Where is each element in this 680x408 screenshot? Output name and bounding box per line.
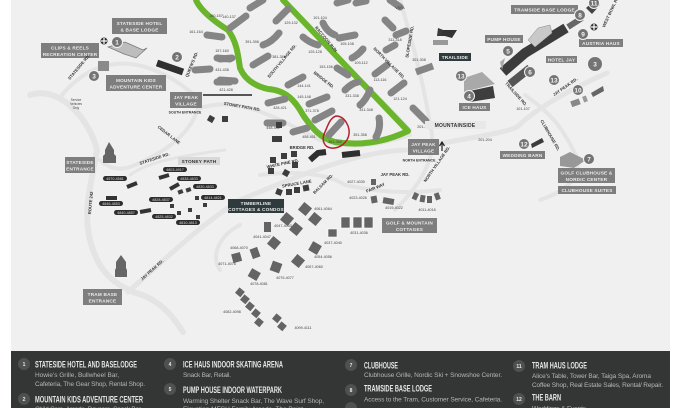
numbered map markers: 9 xyxy=(581,32,585,38)
building unit labels: 4054-4056 xyxy=(314,255,332,259)
building unit labels: 4023-4026 xyxy=(349,196,367,200)
numbered map markers: 13 xyxy=(457,74,465,80)
stateside cottage pills: 4840-4857 xyxy=(117,211,135,215)
building unit labels: 351-358 xyxy=(353,133,367,137)
location label: wedding barn: WEDDING BARN xyxy=(503,153,543,158)
location label: mountain kids: MOUNTAIN KIDS xyxy=(116,78,156,83)
road names: STATESIDE RD. xyxy=(139,151,170,166)
location label: timberline: COTTAGES & CONDOS xyxy=(228,207,284,212)
location label: golf clubhouse: GOLF CLUBHOUSE & xyxy=(561,170,613,176)
location label: jay peak village south: JAY PEAK xyxy=(174,95,199,100)
location label: ice haus: ICE HAUS xyxy=(462,105,486,110)
road names: RACCOON RUN xyxy=(314,25,338,53)
location label: mountainside xyxy=(425,121,486,129)
road names: NORTH VILLAGE RD. xyxy=(372,46,406,80)
legend item 2: mountain kids: MOUNTAIN KIDS ADVENTURE CENTER xyxy=(35,394,143,404)
building unit labels: VSFA xyxy=(395,6,405,10)
building unit labels: 4027-4030 xyxy=(347,180,365,184)
legend item 5: pump house: 5 xyxy=(169,387,172,393)
stateside cottage pills xyxy=(99,167,225,225)
location label: jay peak village south: SOUTH ENTRANCE xyxy=(169,110,202,114)
stateside cottage pills: 4838-4833 xyxy=(180,177,198,181)
location label: stateside entrance: STATESIDE xyxy=(66,160,94,165)
legend item 2: mountain kids xyxy=(18,393,143,408)
location label: stateside entrance xyxy=(65,157,95,173)
red circled unit xyxy=(323,116,349,148)
location label: stoney path xyxy=(178,157,220,165)
location label: mountainside: MOUNTAINSIDE xyxy=(435,123,476,129)
legend panel xyxy=(11,351,670,408)
building unit labels: 4061-4064 xyxy=(314,207,332,211)
location label: hotel jay: HOTEL JAY xyxy=(548,58,576,62)
building unit labels: 160-157 xyxy=(209,14,223,18)
building unit labels: 4011-4018 xyxy=(418,208,436,212)
road names: JAY PEAK RD. xyxy=(381,172,409,177)
legend item 5: pump house: PUMP HOUSE INDOOR WATERPARK xyxy=(183,385,282,395)
legend item 4: ice haus: ICE HAUS INDOOR SKATING ARENA xyxy=(183,360,283,370)
legend item 12: the barn: 12 xyxy=(516,397,522,403)
location label: stateside hotel: & BASE LODGE xyxy=(120,28,159,32)
building unit labels: 371-378 xyxy=(305,109,319,113)
location label: golf clubhouse: NORDIC CENTER xyxy=(566,177,608,182)
legend item 1: stateside hotel: 1 xyxy=(23,362,26,368)
building unit labels: 4031-4036 xyxy=(350,231,368,235)
building unit labels: 4057-4060 xyxy=(305,265,323,269)
road names: SLOPESIDE RD. xyxy=(404,25,415,58)
legend item 11: tram haus lodge: Alice's Table, Tower Bar, Taiga Spa, Aroma xyxy=(532,373,651,380)
road names: QUEEN'S RD. xyxy=(184,51,199,78)
numbered map markers: 13 xyxy=(550,78,558,84)
road names: WHITE PINE RD. xyxy=(266,158,299,169)
road names: FAIR WAY xyxy=(365,181,386,194)
legend item 2: mountain kids: 2 xyxy=(23,397,26,403)
building unit labels: 4068-4070 xyxy=(230,246,248,250)
numbered map markers: 4 xyxy=(467,94,471,100)
building unit labels: 153-156 xyxy=(319,65,333,69)
numbered map markers: 6 xyxy=(528,70,532,76)
road names: STONEY PATH RD. xyxy=(223,101,261,112)
location label: jay peak village north: NORTH ENTRANCE xyxy=(403,158,436,162)
numbered map markers: 12 xyxy=(520,142,528,148)
pump house and tramside complex xyxy=(500,0,600,84)
residential buildings xyxy=(195,0,433,137)
building unit labels: 121-124 xyxy=(393,97,407,101)
location label: ice haus xyxy=(459,103,490,111)
building unit labels: 301-308 xyxy=(412,58,426,62)
road network xyxy=(30,0,607,332)
location label: jay peak village north: VILLAGE xyxy=(413,148,434,154)
road names: Only xyxy=(73,106,80,110)
building unit labels: 101-104 xyxy=(313,16,327,20)
building unit labels: 381-388 xyxy=(272,55,286,59)
road names: NORTH VILLAGE RD. xyxy=(423,145,451,183)
building unit labels: 201-202 xyxy=(417,125,431,129)
entrance totem icons xyxy=(103,142,127,277)
legend item 7: clubhouse: 7 xyxy=(350,363,353,369)
building unit labels: 101-107 xyxy=(516,107,530,111)
legend item 4: ice haus: 4 xyxy=(169,362,172,368)
legend item 1: stateside hotel: STATESIDE HOTEL AND BASELODGE xyxy=(35,360,137,370)
numbered map markers: 3 xyxy=(92,74,96,80)
location label: clips and reels xyxy=(41,43,99,58)
legend item 1: stateside hotel: Cafeteria, The Gear Shop, Rental Shop. xyxy=(35,381,145,388)
numbered map markers xyxy=(88,0,602,164)
location label: austria haus xyxy=(579,39,623,47)
location label: jay peak village north: JAY PEAK xyxy=(411,142,436,147)
location label: tram base entrance xyxy=(83,289,122,305)
jay peak village cottages, dark xyxy=(207,115,360,177)
numbered map markers: 7 xyxy=(587,156,591,164)
building unit labels: 331-338 xyxy=(345,94,359,98)
building unit labels: 431-438 xyxy=(215,68,229,72)
road names: JAY PEAK RD. xyxy=(552,76,578,97)
stateside cottage pills: 4828-4837 xyxy=(152,198,170,202)
location label: stateside hotel: STATESIDE HOTEL xyxy=(117,21,162,26)
road names: SOUTH VILLAGE RD. xyxy=(266,43,297,79)
building unit labels: 201-204 xyxy=(478,138,492,142)
stateside cottage pills: 4803-4917 xyxy=(166,168,184,172)
legend item 4: ice haus xyxy=(164,358,283,379)
building unit labels: 4075-4077 xyxy=(276,276,294,280)
building unit labels: 4041-4047 xyxy=(253,235,271,239)
location label: clips and reels: RECREATION CENTER xyxy=(43,52,98,57)
legend item 8: tramside base lodge: TRAMSIDE BASE LODGE xyxy=(364,384,432,394)
building unit labels: 161-164 xyxy=(189,30,203,34)
numbered map markers: 3 xyxy=(593,62,597,68)
legend item 11: tram haus lodge: TRAM HAUS LODGE xyxy=(532,360,587,370)
building unit labels: 421-428 xyxy=(219,88,233,92)
building unit labels: 4071-4076 xyxy=(218,262,236,266)
road names xyxy=(67,0,620,281)
location label: tramside base lodge: TRAMSIDE BASE LODGE xyxy=(514,8,575,12)
building unit labels: 458-451 xyxy=(302,135,316,139)
building unit labels: 391-398 xyxy=(245,40,259,44)
location label: jay peak village south: VILLAGE xyxy=(175,102,197,106)
building unit labels: 125-128 xyxy=(308,50,322,54)
building unit labels: 4099-4111 xyxy=(294,326,312,330)
location label: wedding barn xyxy=(500,151,545,159)
numbered map markers: 11 xyxy=(591,0,598,8)
stateside cottage pills: 4825-4832 xyxy=(155,215,173,219)
building unit labels: 145-148 xyxy=(297,95,311,99)
location label: tramside base lodge xyxy=(511,5,578,14)
numbered map markers: 2 xyxy=(175,54,179,62)
building unit labels: 105-108 xyxy=(340,42,354,46)
green route xyxy=(196,0,408,144)
stateside cottage pills: 4810-4813 xyxy=(179,221,197,225)
timberline cottages squares xyxy=(231,179,441,331)
legend item 12: the barn: THE BARN xyxy=(532,392,561,402)
building unit labels: 4047-4053 xyxy=(274,224,292,228)
building unit labels: 129-132 xyxy=(284,21,298,25)
building unit labels: 4078-4081 xyxy=(250,282,268,286)
location label: mountain kids: ADVENTURE CENTER xyxy=(110,84,163,90)
location label: stoney path: STONEY PATH xyxy=(182,159,217,164)
legend item 8: tramside base lodge xyxy=(345,384,502,408)
other resort buildings xyxy=(433,28,604,168)
location label: timberline xyxy=(228,199,284,213)
road names: CLUBHOUSE RD. xyxy=(539,119,561,152)
location label: pump house xyxy=(485,35,523,43)
stateside cottage pills: 4846-4853 xyxy=(102,202,120,206)
stateside hotel building xyxy=(98,42,183,72)
legend item 11: tram haus lodge: Coffee Shop, Real Estate Sales, Rental/ Repair. xyxy=(532,382,663,389)
legend item 8: tramside base lodge: 8 xyxy=(350,388,353,394)
legend item 12: the barn xyxy=(513,392,587,408)
location label: stateside entrance: ENTRANCE xyxy=(66,166,94,172)
legend item 4: ice haus: Snack Bar, Retail. xyxy=(183,372,231,379)
building unit labels: 144-141 xyxy=(297,84,311,88)
building unit labels: 4019-4022 xyxy=(385,206,403,210)
building unit labels xyxy=(189,6,530,330)
building unit labels: 109-112 xyxy=(354,61,368,65)
location label: tram base entrance: TRAM BASE xyxy=(88,292,117,297)
building unit labels: 361-368 xyxy=(328,140,342,144)
legend item 7: clubhouse: CLUBHOUSE xyxy=(364,360,398,370)
location label: mountain kids xyxy=(106,75,166,91)
road names: BRIDGE RD. xyxy=(313,70,335,89)
location label: golf clubhouse xyxy=(558,168,615,183)
building unit labels: 140-137 xyxy=(222,15,236,19)
legend item 8: tramside base lodge: Access to the Tram, Customer Service, Cafeteria. xyxy=(364,396,502,404)
location label: tram base entrance: ENTRANCE xyxy=(89,298,116,304)
legend item 5: pump house: Warming Shelter Snack Bar, The Wave Surf Shop, xyxy=(183,398,324,405)
location label: hotel jay xyxy=(546,56,577,63)
location label: trailside xyxy=(439,53,471,61)
location label: trailside: TRAILSIDE xyxy=(442,55,468,60)
building unit labels: 4082-4098 xyxy=(223,310,241,314)
stateside cottage pills: 4814-4821 xyxy=(204,196,222,200)
location label: stateside hotel xyxy=(112,18,167,34)
road names: Vehicles xyxy=(70,102,82,106)
legend item 1: stateside hotel: Howie's Grille, Bullwheel Bar, xyxy=(35,372,119,379)
location label: clips and reels: CLIPS & REELS xyxy=(51,46,89,50)
arrows and snowflake icons xyxy=(100,24,598,151)
road names: Service xyxy=(71,98,82,102)
stateside cottage pills: 4830-4833 xyxy=(196,185,214,189)
location label: golf and mountain cottages: COTTAGES xyxy=(396,227,423,232)
legend item 5: pump house xyxy=(164,383,324,408)
numbered map markers: 8 xyxy=(578,12,582,20)
legend item 7: clubhouse xyxy=(345,359,502,379)
road names: CEDAR LANE xyxy=(157,124,181,145)
building unit labels: 311-318 xyxy=(388,38,402,42)
building unit labels: 448-441 xyxy=(266,126,280,130)
numbered map markers: 5 xyxy=(506,48,510,56)
road names: ROUTE 242 xyxy=(87,191,94,214)
stateside cottage pills: 4570-4581 xyxy=(106,177,124,181)
road names: BALSAM RD. xyxy=(312,173,334,195)
building unit labels: 113-116 xyxy=(374,78,386,82)
road names: BRIDGE RD. xyxy=(290,145,314,150)
location label: golf and mountain cottages: GOLF & MOUNTAIN xyxy=(386,220,433,226)
road names: SPRUCE LANE xyxy=(282,178,312,189)
location label: clubhouse suites xyxy=(558,186,616,194)
road names: TRAILSIDE RD. xyxy=(504,81,528,107)
location label: golf and mountain cottages xyxy=(382,218,437,233)
ice haus building xyxy=(464,72,495,102)
legend item 7: clubhouse: Clubhouse Grille, Nordic Ski + Snowshoe Center. xyxy=(364,372,502,379)
legend item 11: tram haus lodge xyxy=(513,360,663,389)
building unit labels: 341-348 xyxy=(359,108,373,112)
location label: timberline: TIMBERLINE xyxy=(241,201,271,206)
numbered map markers: 1 xyxy=(115,40,119,46)
legend item 11: tram haus lodge: 11 xyxy=(516,364,522,370)
location label: jay peak village south xyxy=(169,92,202,114)
location label: pump house: PUMP HOUSE xyxy=(487,37,521,42)
building unit labels: 4037-4040 xyxy=(324,241,342,245)
road names: JAY PEAK RD. xyxy=(140,258,164,281)
road names: STATESIDE RD. xyxy=(67,53,91,81)
building unit labels: 428-421 xyxy=(273,106,287,110)
numbered map markers: 10 xyxy=(574,88,582,94)
legend item 1: stateside hotel xyxy=(18,358,145,388)
location label: jay peak village north xyxy=(403,139,439,162)
location label: clubhouse suites: CLUBHOUSE SUITES xyxy=(561,188,613,193)
location label: austria haus: AUSTRIA HAUS xyxy=(582,41,620,46)
building unit labels: 157-160 xyxy=(215,49,229,53)
